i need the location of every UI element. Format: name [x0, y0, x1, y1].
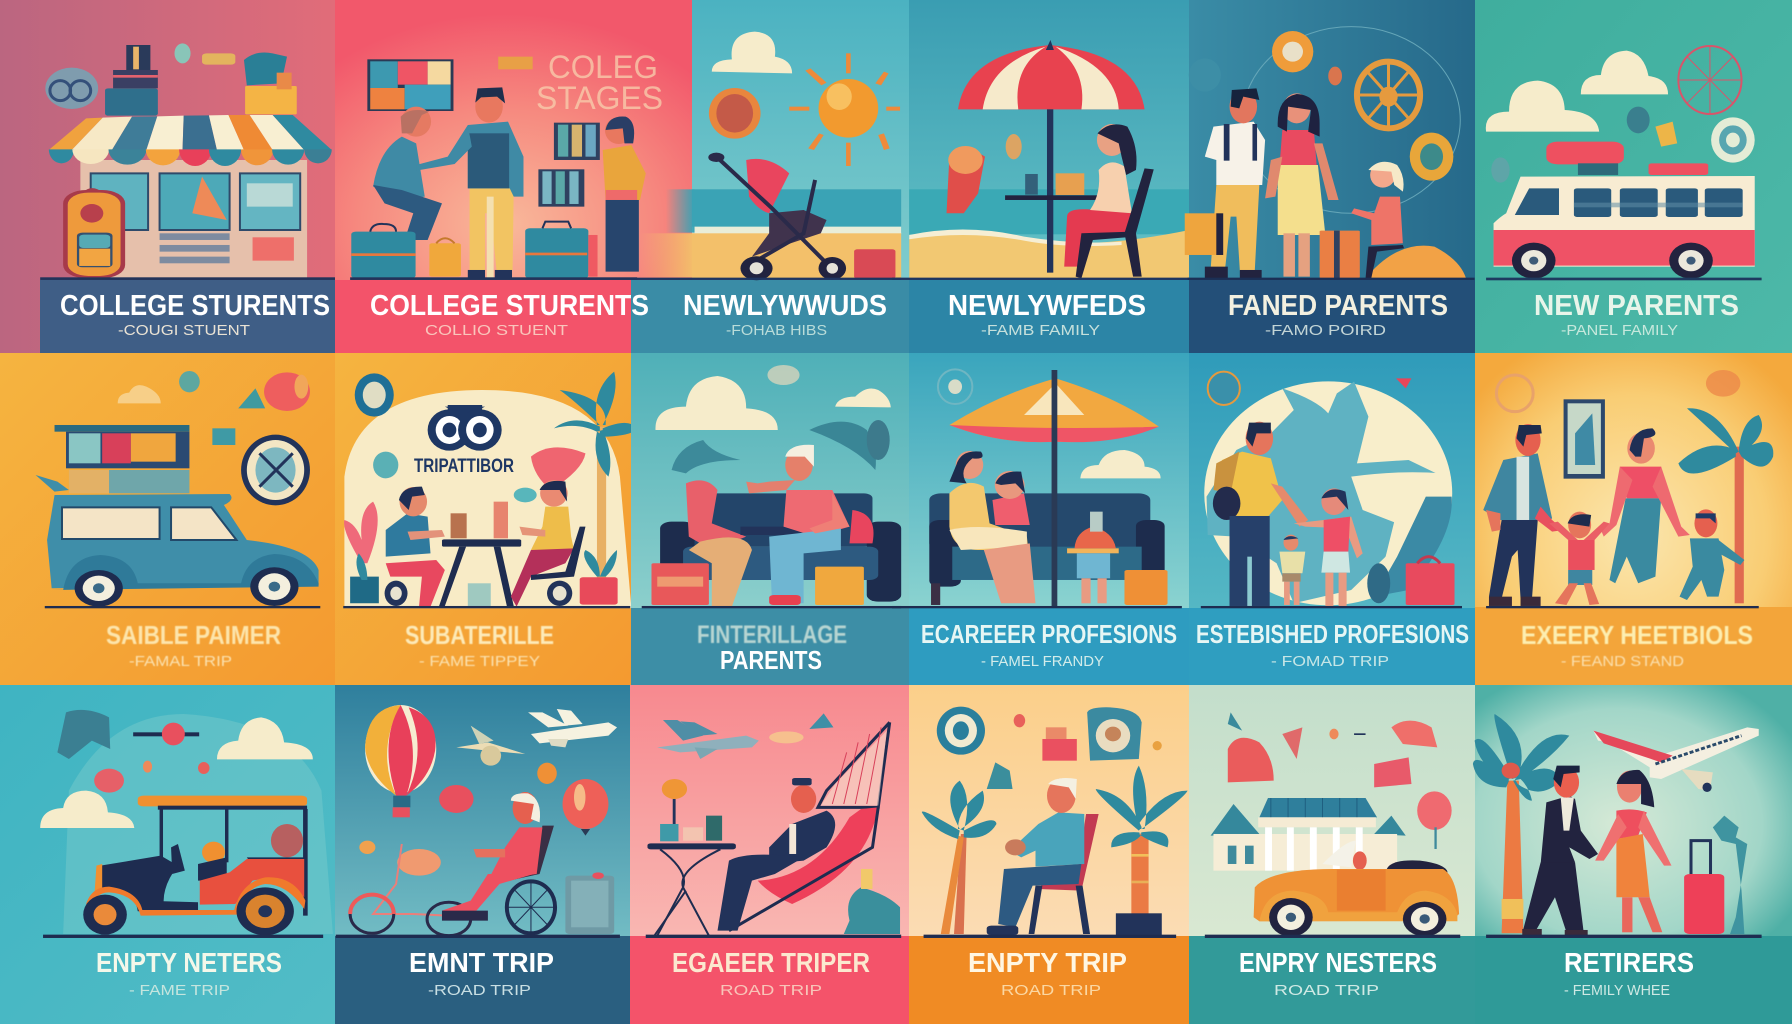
panel: empty trip man with palms: [909, 685, 1189, 1024]
label: college students 1: -COUGI STUENT: [118, 322, 250, 339]
panel: family road trip car: [0, 353, 335, 685]
illustration: three students with luggage: [350, 57, 646, 280]
label: finterillage parents: [697, 621, 847, 675]
label: established professions: [1196, 619, 1469, 670]
label: subaterille: - FAME TIPPEY: [419, 653, 540, 670]
label: enpty neters: [96, 947, 282, 999]
panel: newlyweds stroller on beach: [631, 0, 910, 353]
label: newlywuds: [683, 290, 887, 339]
panel: empty nesters tuk-tuk: [0, 685, 335, 1024]
illustration: logo, diners and palm: [343, 372, 637, 608]
label: early career professions: [921, 619, 1177, 670]
illustration: mother and child under parasol: [892, 369, 1182, 608]
label: finterillage parents: FINTERILLAGE: [697, 621, 847, 649]
panel: early career professions: [892, 353, 1189, 685]
illustration: man reclining on hammock: [646, 713, 901, 938]
label: sainle paimer: -FAMAL TRIP: [129, 653, 232, 670]
label: enpry nesters: [1239, 947, 1437, 999]
panel: famed parents: [1185, 0, 1475, 353]
label: enpty trip: ENPTY TRIP: [968, 947, 1127, 978]
panel: parents on sofa: [631, 353, 909, 685]
panel: eager tripper hammock: [630, 685, 909, 1024]
label: sainle paimer: [106, 620, 281, 670]
label: faned parents: [1228, 290, 1448, 339]
panel: empty nesters convertible: [1189, 685, 1475, 1024]
label: enpry nesters: ROAD TRIP: [1274, 982, 1379, 999]
panel: established professions: [1189, 353, 1475, 685]
panel: new parents bus: [1475, 0, 1792, 353]
panel: retirers couple and plane: [1473, 685, 1792, 1024]
label: subaterille: SUBATERILLE: [405, 620, 554, 650]
label: newlyweds: -FAMB FAMILY: [981, 322, 1100, 339]
illustration: couple on sofa: [642, 365, 901, 608]
label: finterillage parents: PARENTS: [720, 645, 822, 675]
illustration: storefront and backpack: [40, 43, 336, 280]
illustration: camper bus with clouds and ferris wheel: [1486, 46, 1762, 280]
illustration: clouds and tuk-tuk: [40, 710, 333, 938]
label: enpry nesters: ENPRY NESTERS: [1239, 947, 1437, 978]
label: retirers: - FEMILY WHEE: [1564, 982, 1670, 999]
label: emnt trip: -ROAD TRIP: [428, 982, 531, 999]
label: faned parents: FANED PARENTS: [1228, 290, 1448, 322]
label: college students 1: [60, 290, 330, 339]
label: college students 2: COLLIO STUENT: [425, 322, 568, 339]
label: emnt trip: [409, 947, 554, 999]
label: new parents: -PANEL FAMILY: [1561, 322, 1678, 339]
label: egaeer triper: EGAEER TRIPER: [672, 947, 870, 978]
illustration: balloon, plane and traveler: [336, 705, 620, 938]
label: sainle paimer: SAIBLE PAIMER: [106, 620, 281, 650]
illustration: mansion and orange convertible: [1205, 712, 1460, 938]
panel: suburban couple at table: [335, 353, 637, 685]
label: enpty trip: ROAD TRIP: [1001, 982, 1101, 999]
label: enpty neters: ENPTY NETERS: [96, 947, 282, 978]
label: established professions: - FOMAD TRIP: [1271, 653, 1389, 670]
graphic text: colleg stages: COLEG: [548, 49, 658, 85]
label: established professions: ESTEBISHED PROFESIONS: [1196, 619, 1469, 649]
panel: family walking: [1475, 353, 1792, 685]
illustration: couple, gears and grandmother: [1185, 27, 1475, 280]
illustration: family before globe: [1201, 372, 1462, 608]
label: faned parents: -FAMO POIRD: [1265, 322, 1386, 339]
label: egaeer triper: [672, 947, 870, 999]
label: early career professions: - FAMEL FRANDY: [981, 653, 1104, 670]
label: enpty neters: - FAME TRIP: [129, 982, 230, 999]
graphic text: tripadvisor logo wordmark: TRIPATTIBOR: [414, 456, 514, 477]
label: newlywuds: -FOHAB HIBS: [726, 322, 827, 339]
label: college students 2: COLLEGE STURENTS: [370, 290, 649, 322]
graphic text: colleg stages: STAGES: [536, 80, 663, 116]
label: new parents: NEW PARENTS: [1534, 290, 1739, 322]
illustration: beach water and sand: [692, 189, 901, 279]
stroller and sun group: [631, 32, 901, 280]
label: emnt trip: EMNT TRIP: [409, 947, 554, 978]
label: retirers: [1564, 947, 1694, 999]
panel: newlyweds umbrella: [892, 0, 1189, 353]
illustration: parents, children, palm: [1483, 370, 1773, 608]
panel: college students storefront: [0, 0, 336, 353]
illustration: woman at table under umbrella: [892, 40, 1189, 280]
illustration: car with roof cargo: [36, 371, 320, 608]
label: egaeer triper: ROAD TRIP: [720, 982, 822, 999]
label: exeery heetbiols: EXEERY HEETBIOLS: [1521, 620, 1753, 650]
label: retirers: RETIRERS: [1564, 947, 1694, 978]
label band: [40, 280, 335, 353]
label: newlyweds: NEWLYWFEDS: [948, 290, 1146, 322]
panel: empty trip wheelchair: [335, 685, 630, 1024]
label: exeery heetbiols: [1521, 620, 1753, 670]
label: enpty trip: [968, 947, 1127, 999]
label: college students 1: COLLEGE STURENTS: [60, 290, 330, 322]
panel: college students group: [335, 0, 692, 353]
graphic text: colleg stages: [536, 49, 663, 116]
illustration: couple, palm, suitcase and plane: [1473, 714, 1762, 938]
label: college students 2: [370, 290, 649, 339]
illustration: seated man between palms: [922, 707, 1188, 938]
label: subaterille: [405, 620, 554, 670]
label: exeery heetbiols: - FEAND STAND: [1561, 653, 1684, 670]
label: early career professions: ECAREEER PROFESIONS: [921, 619, 1177, 649]
label: newlyweds: [948, 290, 1146, 339]
label: newlywuds: NEWLYWWUDS: [683, 290, 887, 322]
label: new parents: [1534, 290, 1739, 339]
